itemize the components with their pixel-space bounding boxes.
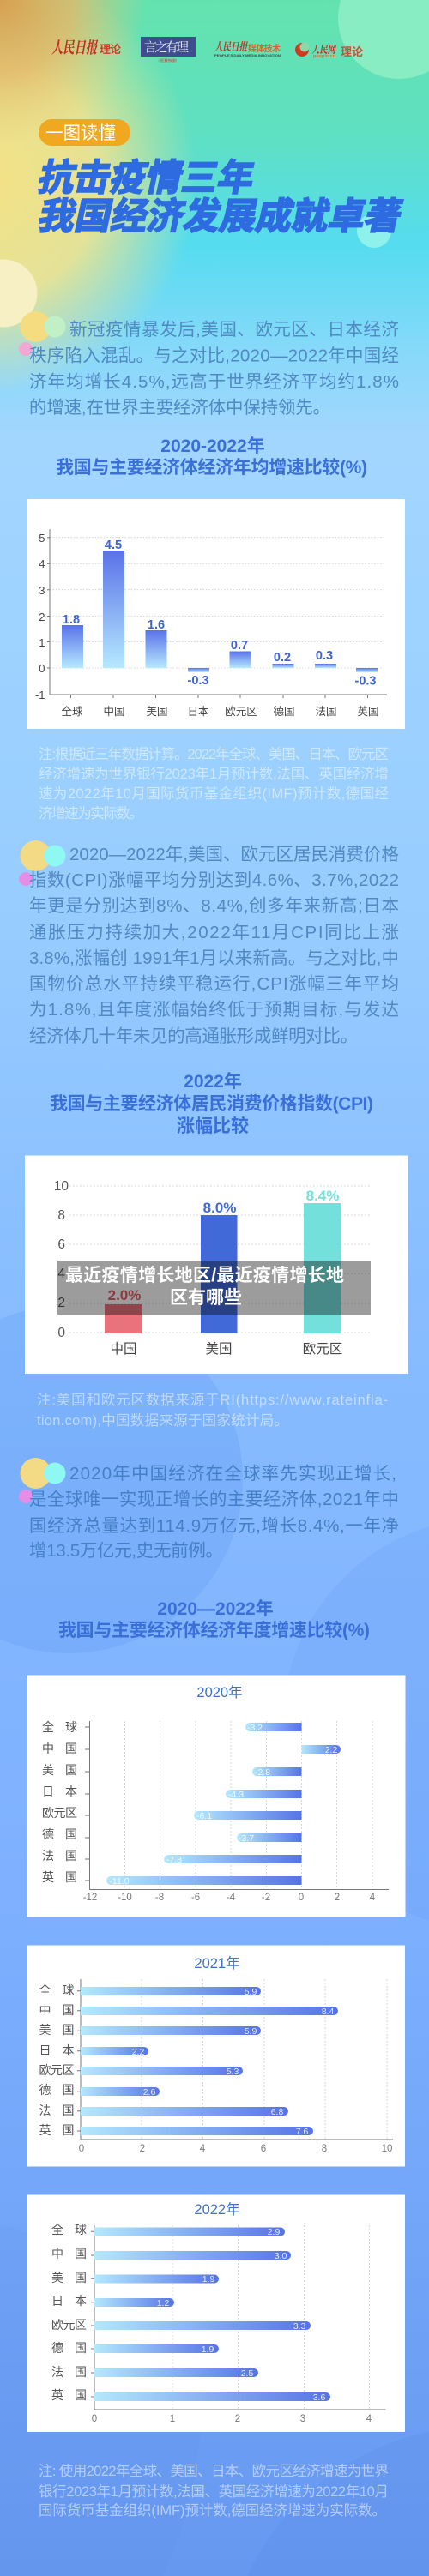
paragraph three: 是全球唯一实现正增长的主要经济体,2021年中 [29,1490,399,1509]
category labels 2022: 全 球 [51,2223,87,2236]
values 2020: -4.3 [228,1790,244,1800]
heading: chart three: 我国与主要经济体经济年度增速比较(%) [58,1620,370,1640]
note three [39,2463,389,2519]
category labels 2021: 日 本 [39,2043,74,2057]
panel: average growth bar chart [27,499,405,729]
values 2022: 1.9 [202,2274,214,2284]
y axis labels: 4 [57,1267,65,1281]
y axis labels [35,532,45,701]
main title [35,158,406,238]
logo: media innovation: 人民日报 [214,38,248,54]
logo: people.cn theory: people.cn [313,54,336,59]
values 2022: 2.9 [268,2227,280,2237]
horizontal bars 2020 [106,1723,341,1885]
values 2020: -11.0 [109,1876,130,1887]
y axis labels: 4 [39,557,45,570]
values 2021: 8.4 [322,2007,334,2017]
paragraph three [29,1464,399,1561]
axis labels 2022: 1 [170,2414,175,2424]
axis labels 2021: 2 [140,2144,145,2154]
paragraph two [29,845,400,1046]
category labels 2021 [39,1983,74,2137]
note three: 注: 使用2022年全球、美国、日本、欧元区经济增速为世界 [39,2463,389,2479]
axis labels 2022 [92,2414,372,2424]
y axis labels: 0 [39,662,45,675]
values 2022: 1.9 [202,2344,214,2355]
panel: 2020 growth [27,1676,405,1917]
values 2021 [132,1987,334,2137]
category labels: 中国 [110,1341,137,1357]
panel title: 2020: 2020年 [196,1684,243,1700]
category labels 2020: 中 国 [42,1742,77,1755]
values 2020: 2.2 [325,1745,337,1755]
horizontal bars 2021 [81,1987,338,2135]
y axis labels: 2 [39,611,45,623]
axis labels 2020: 4 [370,1893,376,1903]
category labels 2021: 法 国 [39,2104,74,2117]
values 2021: 2.2 [132,2047,144,2057]
logo: people.cn theory: 理论 [341,45,363,58]
category labels 2022: 美 国 [51,2271,87,2284]
bars [62,551,378,672]
category labels: 日本 [187,706,209,718]
badge: one picture: 一图读懂 [45,123,116,143]
logo: people's daily theory: 人民日报 [51,35,98,58]
category labels 2020: 美 国 [42,1763,77,1777]
y axis labels: 8 [57,1208,65,1223]
logo: media innovation: 媒体技术 [248,43,281,54]
category labels 2022: 日 本 [51,2294,87,2308]
values 2020: -2.8 [255,1767,270,1778]
logo: media innovation [214,38,281,57]
bar values: -0.3 [187,674,209,688]
logo: people's daily theory: 理论 [100,43,121,56]
axis labels 2020: -8 [155,1893,164,1903]
bar values: 8.0% [203,1200,236,1216]
paragraph two: 为1.8%,且年度涨幅始终低于预期目标,与发达 [29,1000,399,1020]
y axis labels: 3 [39,584,45,597]
paragraph two: 经济体几十年未见的高通胀形成鲜明对比。 [29,1026,358,1046]
note three: 国际货币基金组织(IMF)预计数,德国经济增速为实际数。 [39,2502,386,2519]
note one: 注:根据近三年数据计算。2022年全球、美国、日本、欧元区 [39,746,389,762]
note one [39,746,389,822]
bar values: 0.7 [231,639,248,653]
bars [105,1203,341,1333]
axis labels 2021: 4 [200,2144,206,2154]
values 2020 [109,1723,337,1887]
axis labels 2020: 0 [299,1893,304,1903]
paragraph one: 新冠疫情暴发后,美国、欧元区、日本经济 [69,320,399,340]
axis labels 2021 [79,2144,392,2154]
paragraph two: 国物价总水平持续平稳运行,CPI涨幅三年平均 [29,974,399,994]
category labels 2020: 全 球 [42,1720,77,1734]
panel: 2021 growth [27,1945,405,2166]
category labels 2021: 欧元区 [39,2063,74,2077]
axis labels 2022: 0 [92,2414,97,2424]
category labels 2020: 法 国 [42,1849,77,1863]
heading: chart three: 2020—2022年 [157,1599,274,1619]
heading: chart one: 我国与主要经济体经济年均增速比较(%) [56,457,367,478]
note one: 济增速为实际数。 [39,805,143,822]
logo: people.cn theory: 人民网 [311,42,337,57]
panel: 2022 growth [27,2195,405,2432]
category labels 2021: 德 国 [39,2083,74,2097]
axis labels 2021: 6 [261,2144,266,2154]
panel title: 2021: 2021年 [194,1955,240,1971]
horizontal bars 2022 [94,2228,330,2401]
logo row [51,35,363,63]
heading: chart two: 涨幅比较 [177,1116,249,1136]
category labels 2022: 德 国 [51,2341,87,2355]
category labels: 中国 [103,705,125,718]
axis labels 2022: 2 [235,2414,240,2424]
badge: one picture [39,119,130,146]
axis labels 2020: -6 [191,1893,200,1903]
y axis labels: 6 [57,1237,65,1252]
paragraph two: 指数(CPI)涨幅平均分别达到4.6%、3.7%,2022 [29,870,399,890]
y axis labels: 1 [39,636,45,649]
category labels: 欧元区 [225,706,257,718]
axis labels 2022: 3 [300,2414,305,2424]
axis labels 2021: 0 [79,2144,84,2154]
main title: 抗击疫情三年 [35,158,258,199]
category labels [61,705,379,718]
bar values [63,539,376,688]
bar values: 2.0% [108,1287,141,1303]
heading: chart three [58,1599,370,1640]
icon: dots for paragraph two [19,840,65,886]
logo: people.cn theory [295,42,363,59]
category labels 2021: 全 球 [39,1983,74,1997]
category labels 2022: 法 国 [51,2365,87,2379]
logo: media innovation: PEOPLE'S DAILY MEDIA INNOVATION [214,53,281,57]
category labels: 美国 [146,706,168,718]
main title: 我国经济发展成就卓著 [35,196,406,238]
paragraph one [29,320,399,418]
logo: yan zhi you li: 言之有理 [144,38,189,56]
heading: chart one: 2020-2022年 [160,436,265,456]
category labels 2022 [51,2223,87,2402]
axis labels 2020 [83,1893,376,1903]
panel title: 2022: 2022年 [194,2201,240,2218]
bar values: 0.3 [316,649,333,663]
icon: dots for paragraph three [19,1458,65,1503]
note one: 速为2022年10月国际货币基金组织(IMF)预计数,德国经 [39,785,389,802]
axis labels 2022: 4 [366,2414,372,2424]
values 2021: 5.9 [245,2026,257,2037]
paragraph two: 3.8%,涨幅创 1991年1月以来新高。与之对比,中 [29,948,399,968]
category labels: 全球 [61,705,83,718]
values 2022 [157,2227,325,2403]
category labels 2021: 中 国 [39,2003,74,2017]
axis labels 2021: 10 [382,2144,392,2154]
y axis labels: -1 [35,689,45,701]
values 2021: 2.6 [143,2087,155,2098]
values 2020: -6.1 [196,1811,212,1821]
values 2022: 3.0 [275,2251,287,2261]
values 2022: 3.3 [293,2321,305,2332]
values 2022: 1.2 [157,2298,169,2308]
note three: 银行2023年1月预计数,法国、英国经济增速为2022年10月 [39,2483,389,2500]
paragraph three: 增13.5万亿元,史无前例。 [29,1541,223,1561]
values 2021: 5.9 [245,1987,257,1997]
values 2022: 2.5 [241,2368,253,2379]
bar values: 4.5 [105,539,122,552]
icon: dots for paragraph one [19,311,65,356]
category labels: 欧元区 [303,1341,342,1357]
category labels 2021: 英 国 [39,2123,74,2137]
y axis labels: 10 [54,1179,69,1194]
logo: yan zhi you li: 人民日报中央厨房 [158,57,177,63]
category labels 2020: 欧元区 [42,1806,77,1820]
category labels 2020: 日 本 [42,1785,77,1798]
paragraph one: 秩序陷入混乱。与之对比,2020—2022年中国经 [29,346,399,365]
values 2020: -3.7 [239,1833,254,1844]
values 2021: 7.6 [296,2127,308,2137]
overlay caption banner [57,1261,371,1315]
bar values: 1.8 [63,613,80,627]
heading: chart two: 2022年 [184,1072,242,1092]
paragraph one: 的增速,在世界主要经济体中保持领先。 [29,398,330,418]
axis labels 2020: -12 [83,1893,97,1903]
category labels 2022: 中 国 [51,2247,87,2260]
y axis labels: 0 [57,1326,65,1340]
heading: chart two [50,1072,373,1136]
y axis labels: 2 [57,1296,65,1310]
y axis labels: 5 [39,532,45,545]
category labels 2021: 美 国 [39,2023,74,2037]
bar values: 1.6 [148,618,165,632]
paragraph two: 年更是分别达到8%、8.4%,创多年来新高;日本 [29,896,399,916]
paragraph three: 2020年中国经济在全球率先实现正增长, [69,1464,396,1484]
values 2020: -3.2 [247,1723,263,1733]
overlay caption banner: 最近疫情增长地区/最近疫情增长地 [65,1266,344,1285]
paragraph three: 国经济总量达到114.9万亿元,增长8.4%,一年净 [29,1516,399,1536]
note two: tion.com),中国数据来源于国家统计局。 [37,1412,288,1429]
overlay caption banner: 区有哪些 [170,1288,242,1308]
category labels 2020: 英 国 [42,1870,77,1884]
note one: 经济增速为世界银行2023年1月预计数,法国、英国经济增 [39,766,389,782]
bar values: 8.4% [306,1188,339,1204]
y axis labels [54,1179,69,1340]
paragraph two: 2020—2022年,美国、欧元区居民消费价格 [69,845,400,864]
bar values: -0.3 [355,674,376,688]
heading: chart one [56,436,367,478]
axis labels 2020: -2 [262,1893,270,1903]
bar values: 0.2 [274,651,291,665]
values 2021: 6.8 [271,2107,283,2117]
paragraph two: 通胀压力持续加大,2022年11月CPI同比上涨 [29,923,399,942]
logo: yan zhi you li [141,37,196,63]
heading: chart two: 我国与主要经济体居民消费价格指数(CPI) [50,1094,373,1114]
note two [37,1392,388,1429]
category labels: 美国 [205,1341,233,1357]
category labels 2020: 德 国 [42,1827,77,1841]
panel: CPI bar chart [25,1156,408,1374]
axis labels 2020: -4 [227,1893,236,1903]
values 2022: 3.6 [313,2392,325,2403]
category labels 2022: 英 国 [51,2388,87,2402]
category labels: 英国 [357,706,379,718]
category labels 2020 [42,1720,77,1884]
category labels: 德国 [273,705,295,718]
axis labels 2020: -10 [118,1893,132,1903]
values 2020: -7.8 [166,1855,182,1865]
axis labels 2020: 2 [335,1893,340,1903]
axis labels 2021: 8 [322,2144,327,2154]
values 2021: 5.3 [227,2067,239,2077]
category labels 2022: 欧元区 [51,2318,87,2332]
note two: 注:美国和欧元区数据来源于RI(https://www.rateinfla- [37,1392,388,1408]
paragraph one: 济年均增长4.5%,远高于世界经济平均约1.8% [29,372,399,392]
category labels [110,1341,342,1357]
category labels: 法国 [315,706,337,718]
bar values [108,1188,339,1303]
